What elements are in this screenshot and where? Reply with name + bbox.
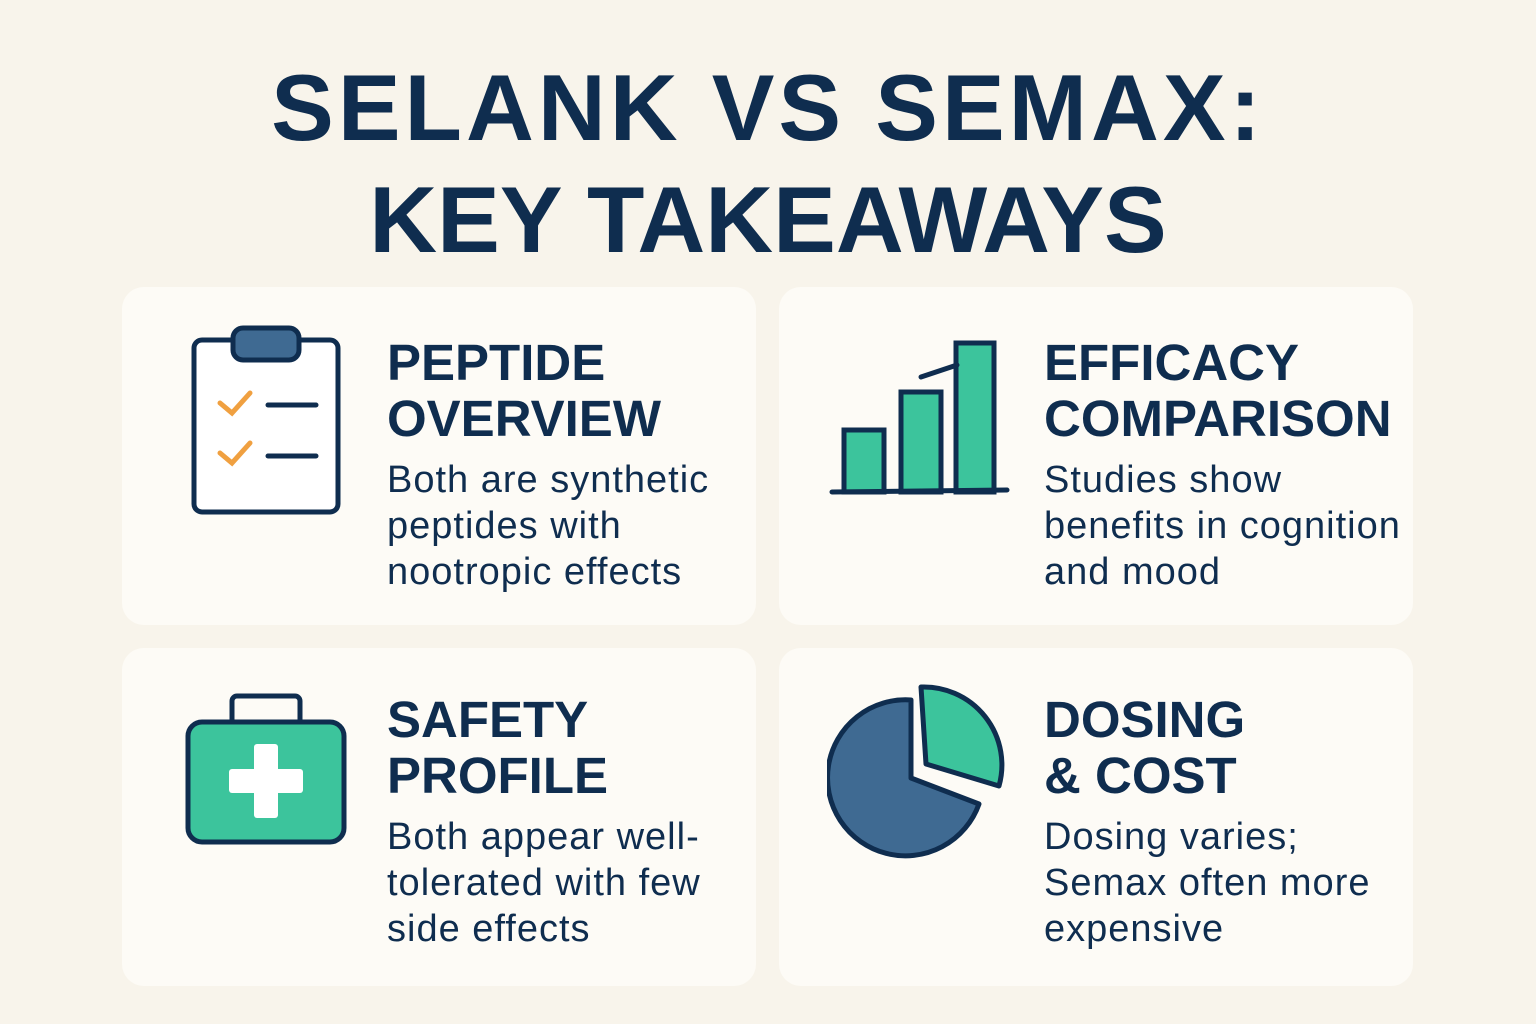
icon: first aid kit: [186, 694, 346, 844]
body text: [387, 816, 701, 950]
title: SELANK VS SEMAX:: [271, 55, 1265, 160]
heading: [387, 334, 661, 447]
heading: SAFETY: [387, 691, 588, 748]
icon: pie chart: [827, 684, 1004, 858]
body text: expensive: [1044, 908, 1224, 950]
panel: dosing & cost: [779, 648, 1413, 986]
body text: Dosing varies;: [1044, 816, 1299, 858]
title: [271, 55, 1265, 272]
icon: bar chart: [830, 340, 1010, 494]
body text: Semax often more: [1044, 862, 1370, 904]
body text: and mood: [1044, 551, 1221, 593]
heading: & COST: [1044, 747, 1237, 804]
body text: side effects: [387, 908, 591, 950]
heading: PROFILE: [387, 747, 608, 804]
panel: peptide overview: [122, 287, 756, 625]
body text: tolerated with few: [387, 862, 701, 904]
body text: benefits in cognition: [1044, 505, 1401, 547]
body text: peptides with: [387, 505, 622, 547]
body text: Both are synthetic: [387, 459, 709, 501]
heading: [1044, 691, 1245, 804]
body text: [1044, 816, 1370, 950]
title: KEY TAKEAWAYS: [369, 167, 1167, 272]
heading: EFFICACY: [1044, 334, 1299, 391]
icon: clipboard: [192, 326, 340, 514]
heading: [1044, 334, 1392, 447]
heading: [387, 691, 608, 804]
heading: OVERVIEW: [387, 390, 661, 447]
body text: [387, 459, 709, 593]
panel: efficacy comparison: [779, 287, 1413, 625]
body text: nootropic effects: [387, 551, 682, 593]
body text: Studies show: [1044, 459, 1282, 501]
body text: Both appear well-: [387, 816, 700, 858]
heading: COMPARISON: [1044, 390, 1392, 447]
heading: DOSING: [1044, 691, 1245, 748]
heading: PEPTIDE: [387, 334, 605, 391]
panel: safety profile: [122, 648, 756, 986]
body text: [1044, 459, 1401, 593]
